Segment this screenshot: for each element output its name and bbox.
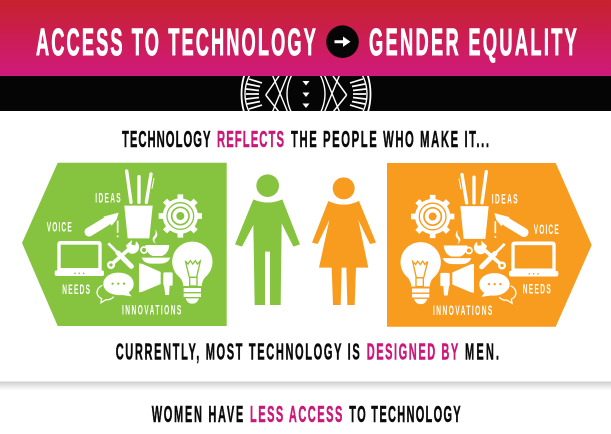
title: ACCESS TO TECHNOLOGY [36, 22, 316, 64]
orange panel labels: INNOVATIONS [433, 303, 492, 319]
panel: green technology hexagon [22, 163, 227, 326]
icon: arrow in black circle [326, 25, 359, 58]
text: less access: TO TECHNOLOGY [349, 402, 461, 427]
text: designed by men: MEN. [465, 339, 499, 365]
green panel labels: NEEDS [62, 282, 90, 298]
orange panel labels: NEEDS [523, 282, 551, 297]
title: GENDER EQUALITY [369, 22, 577, 64]
text: designed by men: DESIGNED BY [367, 339, 458, 365]
text: less access [152, 402, 461, 427]
orange panel labels: VOICE [534, 222, 559, 238]
title [36, 22, 577, 64]
green panel labels: VOICE [47, 220, 72, 236]
text: designed by men [116, 339, 499, 365]
icon: male figure [235, 174, 300, 305]
header banner [0, 0, 611, 76]
text: less access: LESS ACCESS [250, 402, 342, 427]
text: less access: WOMEN HAVE [152, 402, 243, 427]
orange panel icons [401, 171, 558, 304]
panel: orange technology hexagon [387, 163, 592, 327]
text: designed by men: CURRENTLY, MOST TECHNOLOGY IS [116, 339, 360, 365]
black band with eye emblem [0, 76, 611, 111]
section shadow divider [0, 382, 611, 390]
orange panel labels [433, 192, 559, 319]
green panel labels: IDEAS [95, 191, 121, 207]
heading: technology reflects [122, 125, 489, 152]
heading: technology reflects: REFLECTS [217, 125, 284, 152]
green panel labels: INNOVATIONS [122, 303, 181, 318]
orange panel labels: IDEAS [492, 192, 518, 207]
heading: technology reflects: THE PEOPLE WHO MAKE IT... [291, 125, 489, 152]
green panel labels [47, 191, 181, 318]
green panel icons [55, 171, 212, 304]
icon: female figure [312, 177, 376, 305]
heading: technology reflects: TECHNOLOGY [122, 125, 211, 152]
